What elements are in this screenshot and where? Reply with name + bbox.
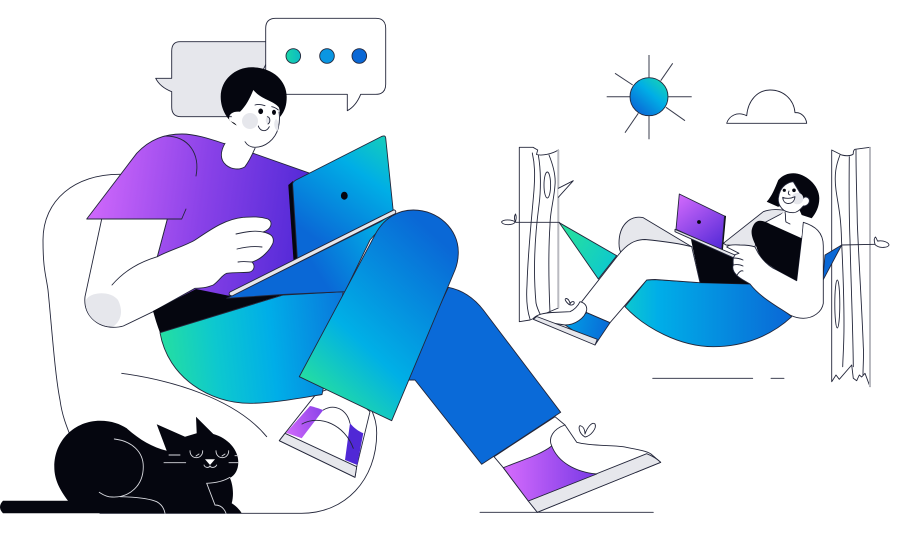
shoe sole <box>533 316 597 345</box>
elbow patch <box>86 293 121 327</box>
laptop screen <box>293 136 393 258</box>
man: black waistband <box>153 289 284 333</box>
dot: teal <box>286 49 301 63</box>
woman: head <box>767 173 819 218</box>
laptop edge <box>721 216 726 251</box>
woman: dress lap <box>691 238 750 284</box>
ground line under man <box>480 511 653 513</box>
cat tail line <box>120 497 165 513</box>
purple canvas <box>503 446 597 501</box>
shoe tongue <box>551 425 565 446</box>
neck <box>221 130 255 169</box>
right bark edge <box>557 150 559 308</box>
cat whiskers <box>164 455 238 463</box>
dot: cyan blue <box>320 49 334 63</box>
rope right <box>842 243 875 246</box>
speech bubble: white with dots <box>266 18 386 111</box>
laptop edge <box>288 181 298 260</box>
cat haunch <box>99 439 143 497</box>
nose <box>266 116 270 124</box>
armchair seam <box>122 373 267 437</box>
woman: finger lines <box>733 258 743 275</box>
cat leg <box>207 477 230 513</box>
man: back shoe <box>279 385 370 477</box>
hammock: right blue end <box>823 245 842 281</box>
man: rear leg <box>405 287 561 464</box>
face <box>230 88 280 147</box>
cat mouth <box>204 465 217 467</box>
webcam <box>341 192 348 200</box>
man: arm and hand <box>85 217 273 327</box>
woman: black top <box>752 221 802 281</box>
sun disc <box>630 78 668 116</box>
man: shirt <box>87 134 310 311</box>
armchair outline <box>43 174 377 513</box>
nose <box>788 191 790 195</box>
keyboard strip <box>229 210 396 296</box>
brows <box>255 104 278 110</box>
branch <box>558 181 573 197</box>
cheek <box>242 113 258 129</box>
knot <box>835 280 840 328</box>
hammock ropes <box>502 214 889 247</box>
man: laptop <box>227 136 396 298</box>
laptop base <box>227 213 394 298</box>
rope loop right <box>874 237 889 247</box>
woman: front leg <box>582 240 700 323</box>
bark lines <box>835 150 864 375</box>
knot <box>544 172 551 198</box>
man: head <box>221 67 287 169</box>
cat nose <box>205 459 215 465</box>
hair <box>767 173 819 218</box>
keyboard strip <box>675 229 735 258</box>
woman: neck <box>770 210 803 236</box>
face <box>778 182 809 213</box>
man: thigh <box>160 292 343 403</box>
hammock: green far end <box>559 223 617 279</box>
woman: back leg grey <box>619 217 692 254</box>
jaw line <box>245 112 279 147</box>
ground lines under hammock <box>653 377 784 379</box>
hammock: main body <box>625 280 792 347</box>
shirt: shoulder seam <box>165 136 197 176</box>
cat eyes <box>190 451 229 458</box>
shoe purple left <box>286 406 323 438</box>
eyes <box>783 188 796 192</box>
shoe lace lines <box>302 407 353 448</box>
shirt: sleeve fold <box>167 209 186 219</box>
sun <box>607 55 692 139</box>
cheek right <box>274 119 278 131</box>
smile <box>258 126 269 131</box>
woman: shoe <box>533 298 610 345</box>
laptop screen <box>676 194 724 251</box>
dot: blue <box>352 49 367 63</box>
man: front shoe and ankle <box>494 417 661 512</box>
shoe sole <box>279 433 357 477</box>
smile <box>783 197 795 204</box>
finger lines <box>236 231 263 262</box>
speech bubble: grey <box>156 42 268 117</box>
right tree <box>832 147 870 387</box>
woman: grey shoulder <box>723 210 787 247</box>
cat body <box>0 417 242 513</box>
sun rays <box>607 55 692 139</box>
bow <box>579 423 595 437</box>
shoe blue upper <box>565 313 610 345</box>
shoe purple right <box>345 423 363 465</box>
man: front leg and knee <box>299 210 458 421</box>
arm inner line <box>112 257 157 285</box>
eyes <box>258 108 276 115</box>
woman: laptop <box>675 194 735 258</box>
nose line <box>267 117 270 124</box>
left tree <box>519 147 573 322</box>
shoe white toe <box>533 302 587 325</box>
woman: body and arm <box>727 221 823 318</box>
webcam <box>697 220 701 224</box>
shoe bow <box>565 298 574 305</box>
woman: neck line <box>785 212 790 224</box>
rope loop left <box>502 214 516 225</box>
cat <box>0 417 242 513</box>
hair <box>221 67 287 126</box>
bark lines <box>527 153 555 319</box>
neck outline <box>221 143 255 169</box>
cloud <box>727 90 807 123</box>
cheek <box>792 193 803 204</box>
rope left <box>516 221 559 223</box>
right bark edge <box>869 147 871 387</box>
sole <box>528 454 661 512</box>
